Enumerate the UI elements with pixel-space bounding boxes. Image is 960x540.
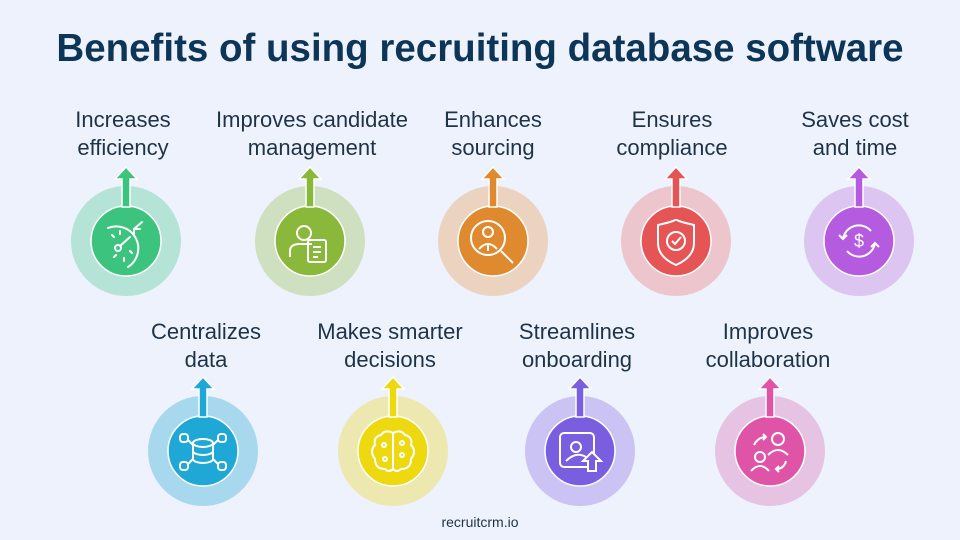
icon: candidate <box>290 226 326 262</box>
item: ensures compliance <box>616 107 731 296</box>
item: enhances sourcing: Enhances <box>444 107 542 132</box>
title: Benefits of using recruiting database software <box>56 27 904 70</box>
item: centralizes data: Centralizes <box>151 319 261 344</box>
item: improves collaboration <box>706 319 830 506</box>
icon: search person <box>471 221 513 263</box>
item: streamlines onboarding <box>519 319 635 506</box>
item: saves cost and time: $ <box>854 231 864 251</box>
item: saves cost and time <box>801 107 914 296</box>
item: centralizes data: data <box>185 347 228 372</box>
item: increases efficiency: Increases <box>75 107 171 132</box>
item: improves candidate management: Improves candidate <box>216 107 408 132</box>
item: ensures compliance: compliance <box>616 135 728 160</box>
icon: database <box>180 434 226 470</box>
item: saves cost and time: Saves cost <box>801 107 909 132</box>
icon: shield <box>658 219 694 265</box>
icon: collaboration <box>751 433 788 472</box>
item: makes smarter decisions <box>317 319 463 506</box>
item: saves cost and time: and time <box>813 135 897 160</box>
item: increases efficiency: efficiency <box>77 135 169 160</box>
item: improves candidate management <box>216 107 408 296</box>
item: enhances sourcing <box>438 107 548 296</box>
item: ensures compliance: Ensures <box>632 107 712 132</box>
icon: onboarding <box>560 433 601 471</box>
footer: source: recruitcrm.io <box>441 514 519 530</box>
item: streamlines onboarding: Streamlines <box>519 319 635 344</box>
icon: brain <box>372 431 414 471</box>
icon: speedometer <box>108 222 142 267</box>
item: makes smarter decisions: Makes smarter <box>317 319 463 344</box>
item: increases efficiency <box>71 107 181 296</box>
item: improves collaboration: Improves <box>723 319 813 344</box>
item: improves candidate management: management <box>248 135 376 160</box>
item: enhances sourcing: sourcing <box>451 135 535 160</box>
item: centralizes data <box>148 319 261 506</box>
item: improves collaboration: collaboration <box>706 347 830 372</box>
item: makes smarter decisions: decisions <box>344 347 436 372</box>
item: streamlines onboarding: onboarding <box>522 347 632 372</box>
icon: dollar cycle <box>839 225 879 257</box>
